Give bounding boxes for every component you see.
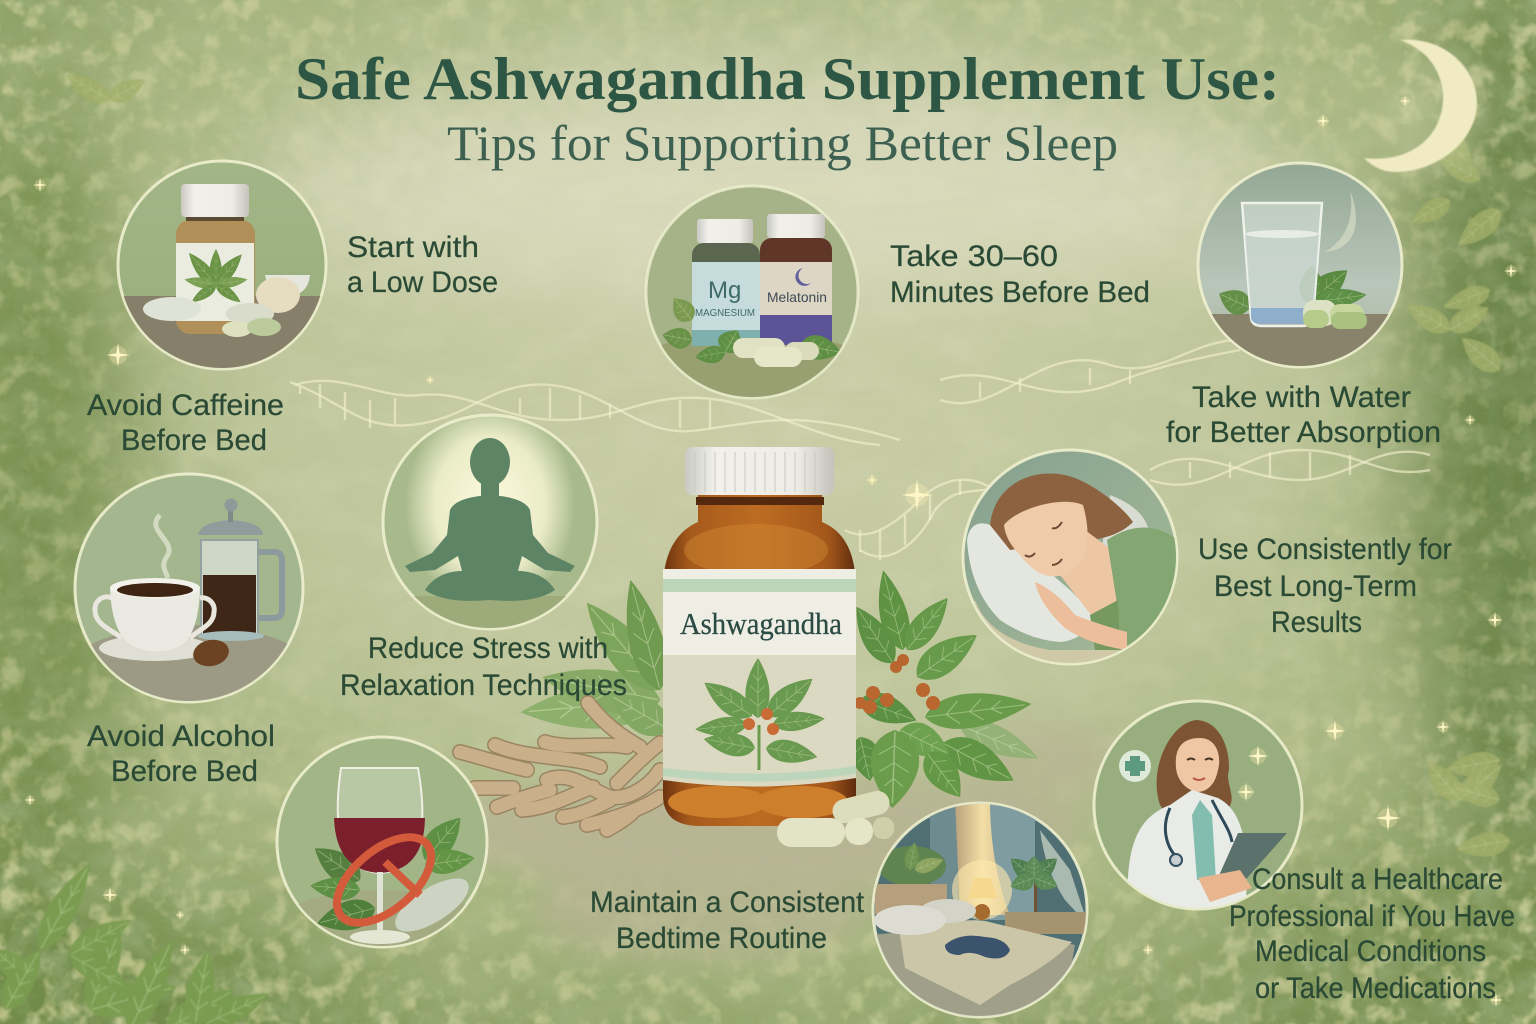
icon: steam [156,515,169,578]
bottle label [663,569,856,787]
title: Safe Ashwagandha Supplement Use: [295,46,1280,112]
icon: leaves and pillow [307,809,477,942]
panel: take 30-60 minutes before bed [644,184,860,400]
icon: melatonin bottle: Melatonin [767,289,827,305]
icon: capsules and leaves [662,298,840,367]
icon: leaves and capsules [1219,266,1366,315]
panel: bedroom routine [870,800,1095,1024]
icon: magnesium bottle: MAGNESIUM [695,308,755,319]
label: take 30-60 minutes before bed: Take 30–60 [890,240,1058,273]
panel: reduce stress [380,400,600,646]
panel: start with a low dose [110,161,330,376]
jar capsules visible [668,786,848,818]
icon: crescent moon [1364,40,1490,172]
icon: meditating figure [405,438,575,601]
icon: medical cross badge [1119,750,1151,782]
label: start with a low dose [347,231,498,299]
bottle label: Ashwagandha [680,606,842,641]
icon: tablets [143,275,310,337]
label: maintain bedtime routine [590,886,865,955]
label: consult healthcare professional [1229,863,1515,1005]
icon: magnesium bottle: Mg [708,277,741,304]
icon: ashwagandha roots [460,703,660,830]
icon: glass of water [1242,203,1322,326]
icon: french press [198,498,282,641]
label: reduce stress: Reduce Stress with [368,632,608,665]
icon: plant leaves left [519,576,678,746]
icon: coffee cup [95,578,214,661]
label: consult healthcare professional: Consult a Healthcare [1252,863,1503,896]
label: take with water [1166,381,1441,449]
central illustration: ashwagandha bottle [440,447,1120,960]
label: take 30-60 minutes before bed: Minutes Before Bed [890,276,1150,309]
label: avoid caffeine: Before Bed [121,424,267,457]
label: avoid caffeine: Avoid Caffeine [87,389,284,422]
icon: label plant [694,658,826,770]
label: avoid alcohol: Before Bed [111,755,258,788]
panel: take with water [1190,163,1410,374]
label: take with water: Take with Water [1192,381,1411,414]
panel: use consistently sleeping woman [960,450,1178,680]
label: consult healthcare professional: Medical Conditions [1255,935,1486,968]
label: reduce stress [340,632,627,702]
panel: consult doctor [1094,701,1302,915]
label: maintain bedtime routine: Bedtime Routine [616,922,827,955]
label: take with water: for Better Absorption [1166,416,1441,449]
icon: magnesium bottle [692,219,760,346]
icon: small supplement bottle [176,184,255,334]
amber jar [663,495,856,826]
panel: avoid alcohol wine [272,737,492,970]
subtitle: Tips for Supporting Better Sleep [447,115,1118,171]
title [295,46,1280,171]
ground path [440,720,1120,960]
label: start with a low dose: a Low Dose [347,266,498,299]
icon: prohibition sign [322,821,446,939]
label: avoid alcohol: Avoid Alcohol [87,720,275,753]
label: take 30-60 minutes before bed [890,240,1150,309]
icon: plant leaves right [844,567,1044,809]
panel: avoid caffeine coffee [60,474,320,735]
icon: capsules [777,788,894,847]
icon: plants [875,841,1095,934]
label: reduce stress: Relaxation Techniques [340,669,627,702]
label: consult healthcare professional: or Take Medications [1255,972,1496,1005]
label: use consistently: Results [1271,606,1362,639]
icon: coffee bean [191,637,231,669]
label: use consistently: Use Consistently for [1198,533,1452,566]
curtains [930,800,958,920]
label: avoid caffeine [87,389,284,457]
dna strands [290,340,1430,560]
icon: lamp [952,860,1012,920]
label: maintain bedtime routine: Maintain a Consistent [590,886,865,919]
icon: sleeping woman [960,473,1178,680]
jar cap [685,447,834,495]
label: use consistently: Best Long-Term [1214,570,1417,603]
label: start with a low dose: Start with [347,231,479,264]
icon: doctor [1128,720,1287,915]
label: avoid alcohol [87,720,275,788]
icon: melatonin bottle [760,214,832,345]
icon: bed with sleep mask [870,899,1075,1024]
label: use consistently [1198,533,1452,639]
icon: wine glass [334,768,425,944]
